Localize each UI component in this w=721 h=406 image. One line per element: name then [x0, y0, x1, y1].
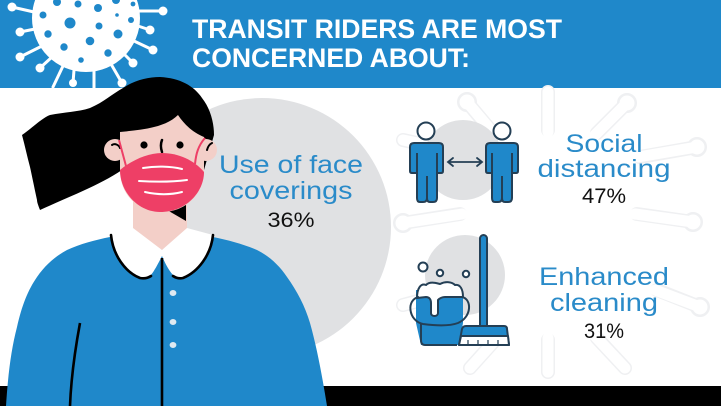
hair — [22, 77, 214, 210]
label: enhanced cleaning: 31% — [584, 320, 624, 343]
collar — [111, 228, 213, 279]
face — [120, 115, 204, 212]
label: social distancing: distancing — [538, 155, 670, 183]
label: enhanced cleaning — [539, 263, 669, 343]
background virus watermark — [400, 92, 703, 372]
neck — [133, 195, 187, 250]
shirt — [6, 237, 327, 406]
eyes and nose — [140, 141, 148, 149]
label: enhanced cleaning: Enhanced — [539, 263, 669, 291]
icon: bucket and mop — [410, 235, 509, 345]
label: social distancing — [538, 130, 670, 208]
buttons — [170, 290, 176, 348]
title: TRANSIT RIDERS ARE MOST — [192, 14, 562, 44]
label: use of face coverings: Use of face — [219, 151, 363, 179]
header band — [0, 0, 721, 88]
title — [192, 14, 562, 73]
footer band — [0, 386, 721, 406]
icon: social distancing — [410, 120, 518, 202]
title: CONCERNED ABOUT: — [192, 43, 470, 73]
figure: woman with mask — [6, 77, 327, 406]
label: use of face coverings: 36% — [268, 209, 314, 232]
label: social distancing: 47% — [582, 185, 626, 208]
label: enhanced cleaning: cleaning — [550, 289, 658, 317]
ears — [104, 139, 126, 161]
mask — [120, 153, 204, 212]
neck shadow — [167, 205, 186, 221]
label: use of face coverings — [219, 151, 363, 232]
label: use of face coverings: coverings — [230, 177, 352, 205]
gray circle behind face coverings — [133, 98, 391, 356]
label: social distancing: Social — [566, 130, 642, 158]
icon: virus — [8, 0, 168, 88]
placket line — [161, 258, 163, 406]
arm line — [70, 323, 80, 406]
